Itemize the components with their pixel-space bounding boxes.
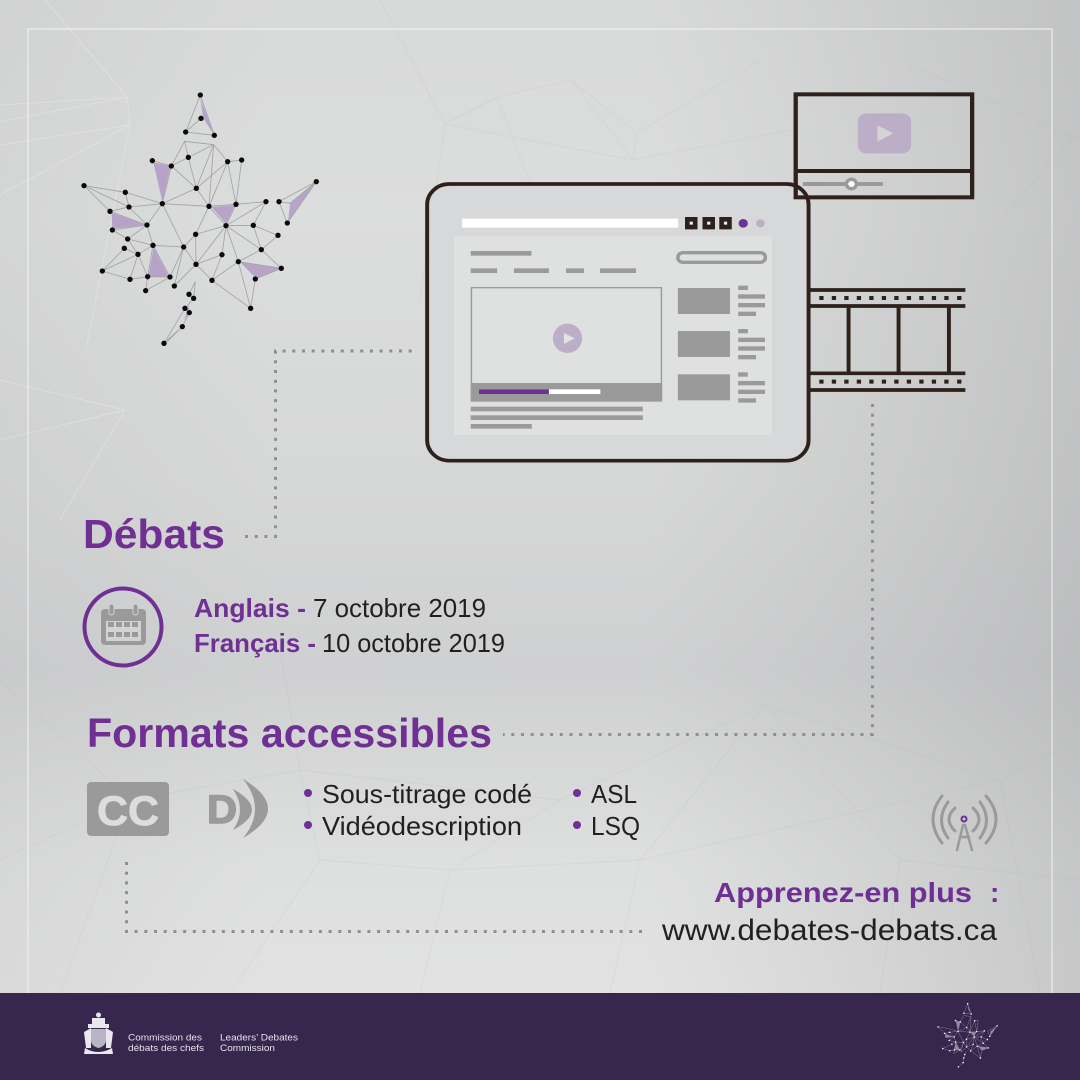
video caption lines: [471, 407, 643, 429]
commission name, French: Commission des: [128, 1032, 202, 1044]
tablet outline: [427, 184, 809, 461]
dotted connector: film strip to Formats accessibles: [503, 404, 872, 734]
list of accessible formats: Sous-titrage codé: [322, 779, 532, 809]
debate dates: Français -: [194, 628, 316, 658]
video thumbnails list: [678, 286, 765, 403]
call to action: learn more: Apprenez-en plus: [714, 877, 972, 908]
call to action: learn more: :: [990, 877, 999, 908]
debate dates: [194, 593, 505, 658]
dotted connector: CC icon to website: [126, 862, 643, 932]
icon: calendar in circle: [84, 588, 162, 666]
tablet body: [427, 184, 809, 461]
commission name, English: [220, 1032, 298, 1054]
list of accessible formats: Vidéodescription: [322, 811, 522, 841]
film strip: [807, 290, 965, 390]
logo: white network maple leaf: [937, 1003, 998, 1068]
list of accessible formats: [304, 779, 640, 841]
address bar: [462, 219, 678, 228]
commission name, English: Commission: [220, 1043, 275, 1054]
icon: described video: D: [207, 788, 237, 832]
illustration: tablet, video player and film strip: [427, 94, 972, 461]
list of accessible formats: LSQ: [591, 811, 640, 841]
debate dates: 7 octobre 2019: [313, 593, 486, 623]
commission name, French: [128, 1032, 204, 1054]
icon: closed captions: CC: [97, 787, 159, 834]
website address: www.debates-debats.ca: [661, 914, 997, 947]
heading: Formats accessibles: Formats accessibles: [87, 710, 492, 756]
icon: described video: [207, 779, 268, 838]
dotted connector: tablet to Débats: [245, 351, 413, 536]
commission name, English: Leaders’ Debates: [220, 1032, 298, 1044]
video player window: [796, 94, 972, 197]
tablet screen: [454, 236, 772, 435]
toolbar buttons: [685, 217, 765, 229]
commission name, French: débats des chefs: [128, 1043, 204, 1054]
search field: [678, 253, 765, 262]
icon: network maple leaf: [81, 92, 319, 346]
heading: Débats: Débats: [83, 511, 225, 557]
debate dates: Anglais -: [194, 593, 306, 623]
main video: [471, 288, 662, 401]
icon: closed captions: [87, 782, 169, 836]
debate dates: 10 octobre 2019: [322, 628, 505, 658]
logo: coat of arms: [84, 1012, 113, 1054]
footer band: [0, 993, 1080, 1080]
page header lines: [471, 251, 636, 273]
list of accessible formats: ASL: [591, 779, 637, 809]
icon: broadcast antenna: [933, 796, 996, 850]
